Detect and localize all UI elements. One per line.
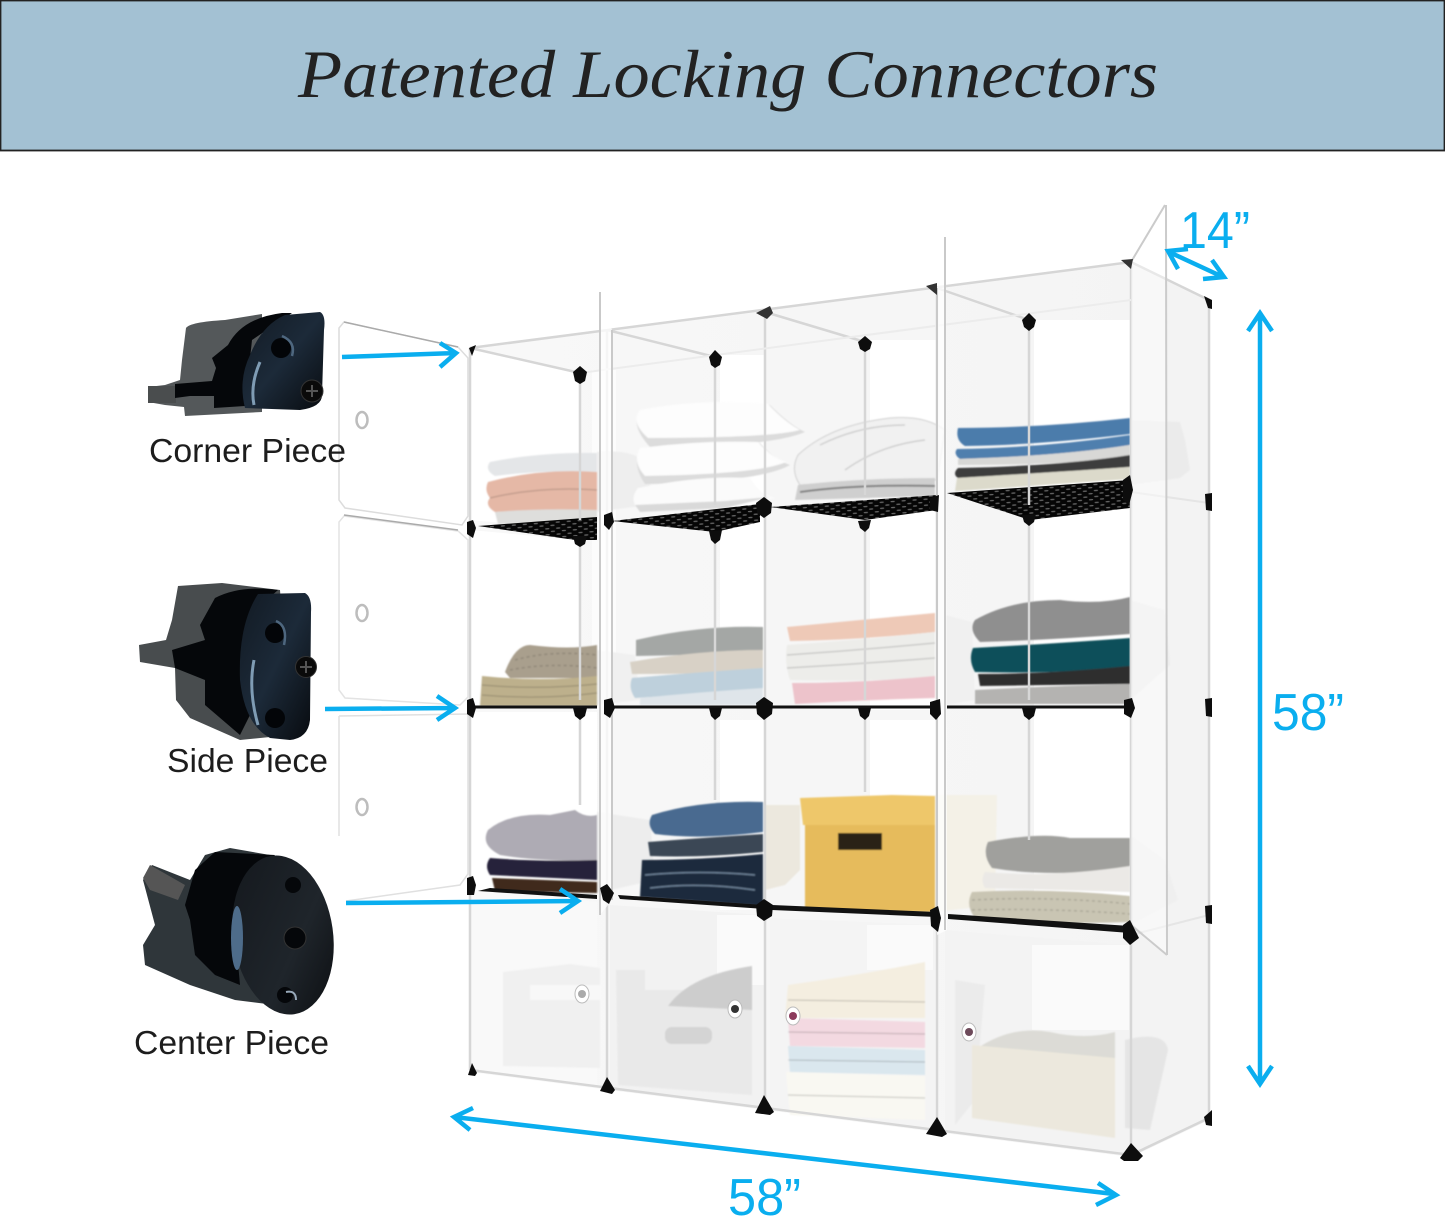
- connector photo: side piece: [139, 583, 316, 740]
- connector photo: center piece: [143, 848, 344, 1021]
- folded clothes: row two: [480, 597, 1130, 706]
- shelf three: black panels: [478, 888, 1130, 933]
- arrow: depth dimension: [1168, 249, 1224, 279]
- black connector nodes: [467, 259, 1212, 1161]
- top edge highlight of upper door: [344, 322, 458, 530]
- shelf two: thin black rails: [475, 706, 1130, 708]
- title text: Patented Locking Connectors: [297, 36, 1158, 112]
- arrow: corner piece to shelf: [342, 343, 456, 367]
- arrow: height dimension: [1248, 313, 1272, 1084]
- shelf one: black mesh panels: [478, 480, 1130, 540]
- frosted bottom-row items: [503, 962, 1168, 1138]
- arrow: width dimension: [454, 1108, 1116, 1205]
- label: center piece: Center Piece: [134, 1024, 329, 1061]
- frame edges of the unit: [470, 262, 1209, 1155]
- finger holes on front doors: [575, 985, 976, 1041]
- arrow: side piece to shelf: [325, 696, 455, 720]
- label: side piece: Side Piece: [167, 742, 328, 779]
- ghost items behind doors: [597, 420, 1190, 925]
- door finger holes: [356, 412, 368, 815]
- title banner: [0, 0, 1444, 150]
- label: depth 14 inches: 14”: [1180, 202, 1250, 260]
- label: height 58 inches: 58”: [1272, 684, 1344, 742]
- open door panels seen edge-on: [600, 205, 1167, 955]
- label: width 58 inches: 58”: [728, 1169, 801, 1227]
- folded clothes: row one: [486, 402, 1130, 524]
- label: corner piece: Corner Piece: [149, 432, 346, 469]
- open door panels on the left: [339, 322, 468, 901]
- connector photo: corner piece: [148, 312, 324, 416]
- shelf body and back panels: [470, 262, 1209, 1157]
- arrow: center piece to shelf: [346, 889, 578, 913]
- cube storage shelving unit: [339, 205, 1212, 1161]
- folded clothes and box: row three: [486, 795, 1130, 923]
